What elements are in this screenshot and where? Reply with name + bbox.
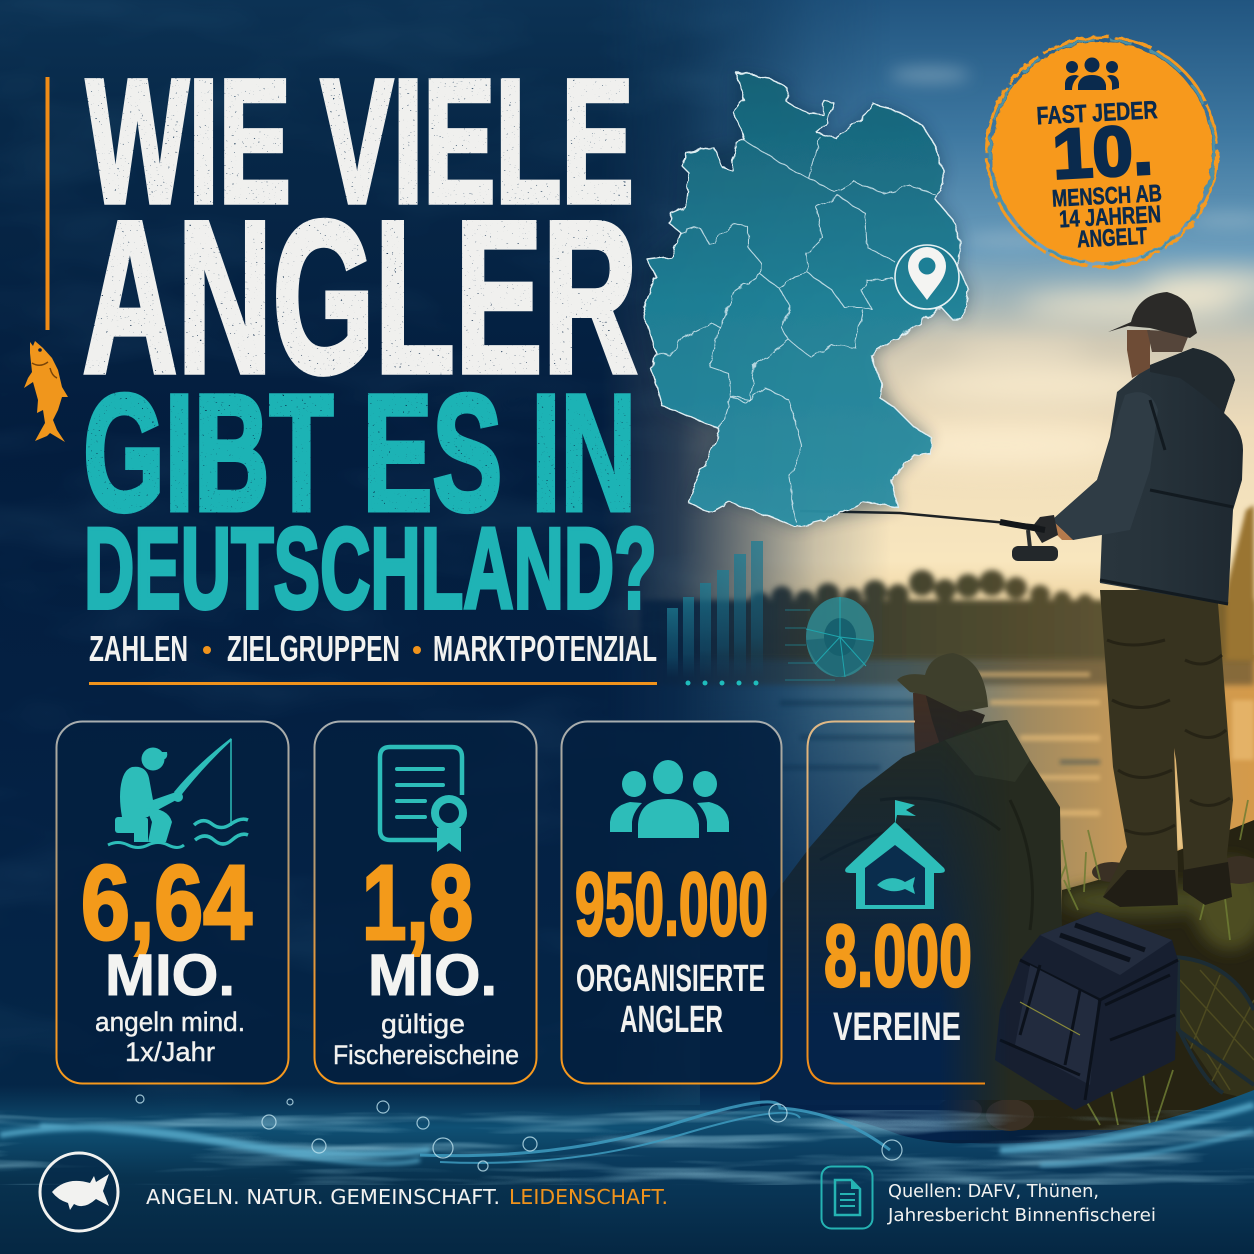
- icon: orange fish: [24, 341, 68, 442]
- panel: 1,8 Mio.: MIO.: [368, 943, 497, 1008]
- badge text: MENSCH AB: [1051, 180, 1163, 213]
- badge text: ANGELT: [1076, 223, 1148, 253]
- panel: 8.000 Vereine: 8.000: [824, 906, 972, 1005]
- icon: sources document: [822, 1166, 872, 1228]
- subtitle: Zahlen, Zielgruppen, Marktpotenzial: ZIELGRUPPEN: [227, 628, 400, 669]
- subtitle: Zahlen, Zielgruppen, Marktpotenzial: ZAHLEN: [89, 628, 188, 669]
- subtitle: Zahlen, Zielgruppen, Marktpotenzial: MARKTPOTENZIAL: [433, 628, 657, 669]
- slogan: ANGELN. NATUR. GEMEINSCHAFT.: [146, 1185, 500, 1209]
- person: standing angler: [1032, 292, 1243, 907]
- panel: 6,64 Mio.: [56, 722, 288, 1084]
- card 4 dark foreground shade: [700, 732, 1000, 1140]
- subtitle: Zahlen, Zielgruppen, Marktpotenzial: [89, 628, 657, 669]
- tackle bag and landing net: [995, 912, 1254, 1110]
- panel: 6,64 Mio.: MIO.: [105, 943, 235, 1008]
- chart: decorative pie: [785, 597, 874, 680]
- badge text: FAST JEDER: [1036, 96, 1158, 130]
- panel: 8.000 Vereine: VEREINE: [833, 1005, 961, 1049]
- panel: 6,64 Mio.: angeln mind.: [95, 1007, 245, 1037]
- accent: subtitle underline: [89, 682, 657, 685]
- panel: 8.000 Vereine: [808, 722, 985, 1084]
- badge text: [1036, 96, 1165, 255]
- shoreline ground with rocks and grass: [930, 800, 1254, 1131]
- panel: 1,8 Mio.: [314, 722, 536, 1084]
- slogan: [146, 1185, 668, 1209]
- panel: 1,8 Mio.: 1,8: [362, 844, 473, 962]
- icon: three people: [610, 760, 729, 838]
- icon: map location pin: [895, 245, 959, 309]
- map: Germany with federal states: [644, 73, 969, 527]
- icon: group of people: [1065, 58, 1119, 90]
- panel: 6,64 Mio.: 6,64: [81, 844, 252, 962]
- panel: 950.000 organisierte Angler: ORGANISIERTE: [576, 958, 765, 1000]
- sources text: Quellen: DAFV, Thünen,: [888, 1181, 1099, 1202]
- title: [82, 42, 657, 633]
- accent: orange vertical line: [46, 77, 50, 330]
- panel: 1,8 Mio.: gültige: [381, 1009, 465, 1039]
- person: seated angler: [760, 653, 1062, 1100]
- panel: 1,8 Mio.: Fischereischeine: [333, 1040, 519, 1070]
- sources text: Jahresbericht Binnenfischerei: [887, 1205, 1156, 1226]
- badge: fast jeder 10. Mensch: [987, 37, 1217, 267]
- icon: seated angler: [108, 738, 248, 848]
- panel: 950.000 organisierte Angler: ANGLER: [620, 999, 723, 1041]
- badge text: 10.: [1051, 110, 1155, 194]
- panel: 950.000 organisierte Angler: [562, 722, 782, 1084]
- background: navy overlay with ripple texture: [0, 0, 878, 1105]
- sources text: [887, 1181, 1156, 1226]
- icon: clubhouse with flag and fish: [845, 800, 945, 909]
- panel: 950.000 organisierte Angler: 950.000: [575, 855, 768, 955]
- map state borders: [656, 137, 936, 523]
- footer: water band with bubbles: [0, 1085, 1254, 1254]
- fishing rod and reel: [800, 511, 1058, 561]
- slogan: LEIDENSCHAFT.: [509, 1185, 668, 1209]
- icon: certificate with seal: [380, 747, 463, 852]
- logo: fish in circle: [40, 1153, 118, 1231]
- panel: 6,64 Mio.: 1x/Jahr: [125, 1037, 215, 1067]
- badge text: 14 JAHREN: [1058, 201, 1162, 233]
- chart: decorative bars: [667, 541, 763, 686]
